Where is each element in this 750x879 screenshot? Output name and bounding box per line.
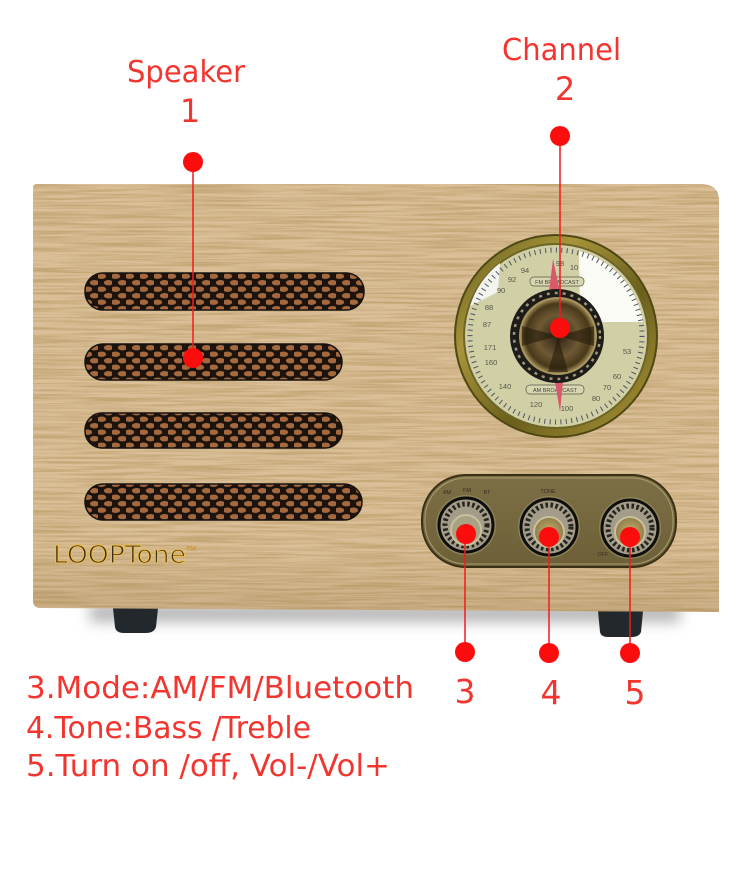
scale numbers: 87 — [483, 320, 491, 329]
callout 1: speaker: 1 — [180, 92, 200, 130]
scale numbers: 98 — [556, 259, 564, 268]
brand logo: TM — [186, 546, 196, 553]
slot 3 — [85, 413, 342, 448]
function list: 4.Tone:Bass /Treble — [26, 711, 311, 746]
callout 5: power — [620, 527, 646, 712]
knob: volume — [599, 497, 661, 559]
glass glare — [579, 251, 643, 322]
tuning dial — [455, 235, 657, 437]
callout 1: speaker — [127, 55, 246, 368]
panel labels: OFF — [598, 552, 609, 558]
knob: tone — [518, 496, 580, 558]
panel labels: BT — [483, 490, 491, 496]
tuning knob — [510, 289, 604, 383]
scale numbers: 90 — [497, 286, 505, 295]
callout 4: tone: 4 — [540, 673, 562, 712]
callout 1: speaker: Speaker — [127, 55, 246, 90]
scale numbers: 171 — [484, 343, 496, 352]
scale numbers: 60 — [613, 372, 621, 381]
scale ticks — [470, 250, 642, 422]
panel labels: TONE — [540, 489, 556, 495]
callout 2: channel: Channel — [502, 33, 621, 68]
scale numbers: 140 — [499, 382, 511, 391]
knob: mode — [436, 495, 496, 555]
scale numbers: 120 — [530, 400, 542, 409]
callout 3: mode — [454, 524, 476, 711]
callout 2: channel: 2 — [555, 70, 575, 108]
slot 4 — [85, 484, 362, 520]
function list — [26, 671, 414, 784]
scale numbers: 80 — [592, 394, 600, 403]
panel labels: AM — [443, 490, 452, 496]
scale numbers: 92 — [508, 275, 516, 284]
slot 1 — [85, 273, 364, 310]
control panel — [422, 475, 676, 567]
brand logo: LOOPTone — [53, 540, 186, 569]
callout 5: power: 5 — [624, 673, 646, 712]
tuning dial: FM BROADCAST — [535, 280, 579, 286]
pointer — [549, 259, 563, 412]
scale numbers: 94 — [521, 266, 529, 275]
function list: 3.Mode:AM/FM/Bluetooth — [26, 671, 414, 706]
foot left — [113, 608, 158, 633]
tuning dial: AM BROADCAST — [533, 388, 578, 394]
floor shadow — [90, 604, 680, 622]
callout 3: mode: 3 — [454, 672, 476, 711]
callout 2: channel — [502, 33, 621, 338]
slot 2 — [85, 344, 342, 380]
panel labels — [443, 488, 609, 558]
radio body — [33, 184, 723, 614]
scale numbers: 53 — [623, 347, 631, 356]
band labels — [530, 277, 584, 286]
function list: 5.Turn on /off, Vol-/Vol+ — [26, 749, 390, 784]
callout 4: tone — [539, 527, 562, 712]
scale numbers — [483, 259, 631, 413]
knob sunburst — [522, 326, 594, 372]
scale numbers: 160 — [485, 358, 497, 367]
scale numbers: 100 — [561, 404, 573, 413]
bezel — [455, 235, 657, 437]
scale numbers: 10 — [570, 263, 578, 272]
foot right — [598, 611, 643, 637]
speaker slots — [85, 273, 364, 520]
scale numbers: 70 — [603, 383, 611, 392]
scale numbers: 88 — [485, 303, 493, 312]
panel labels: FM — [463, 488, 471, 494]
